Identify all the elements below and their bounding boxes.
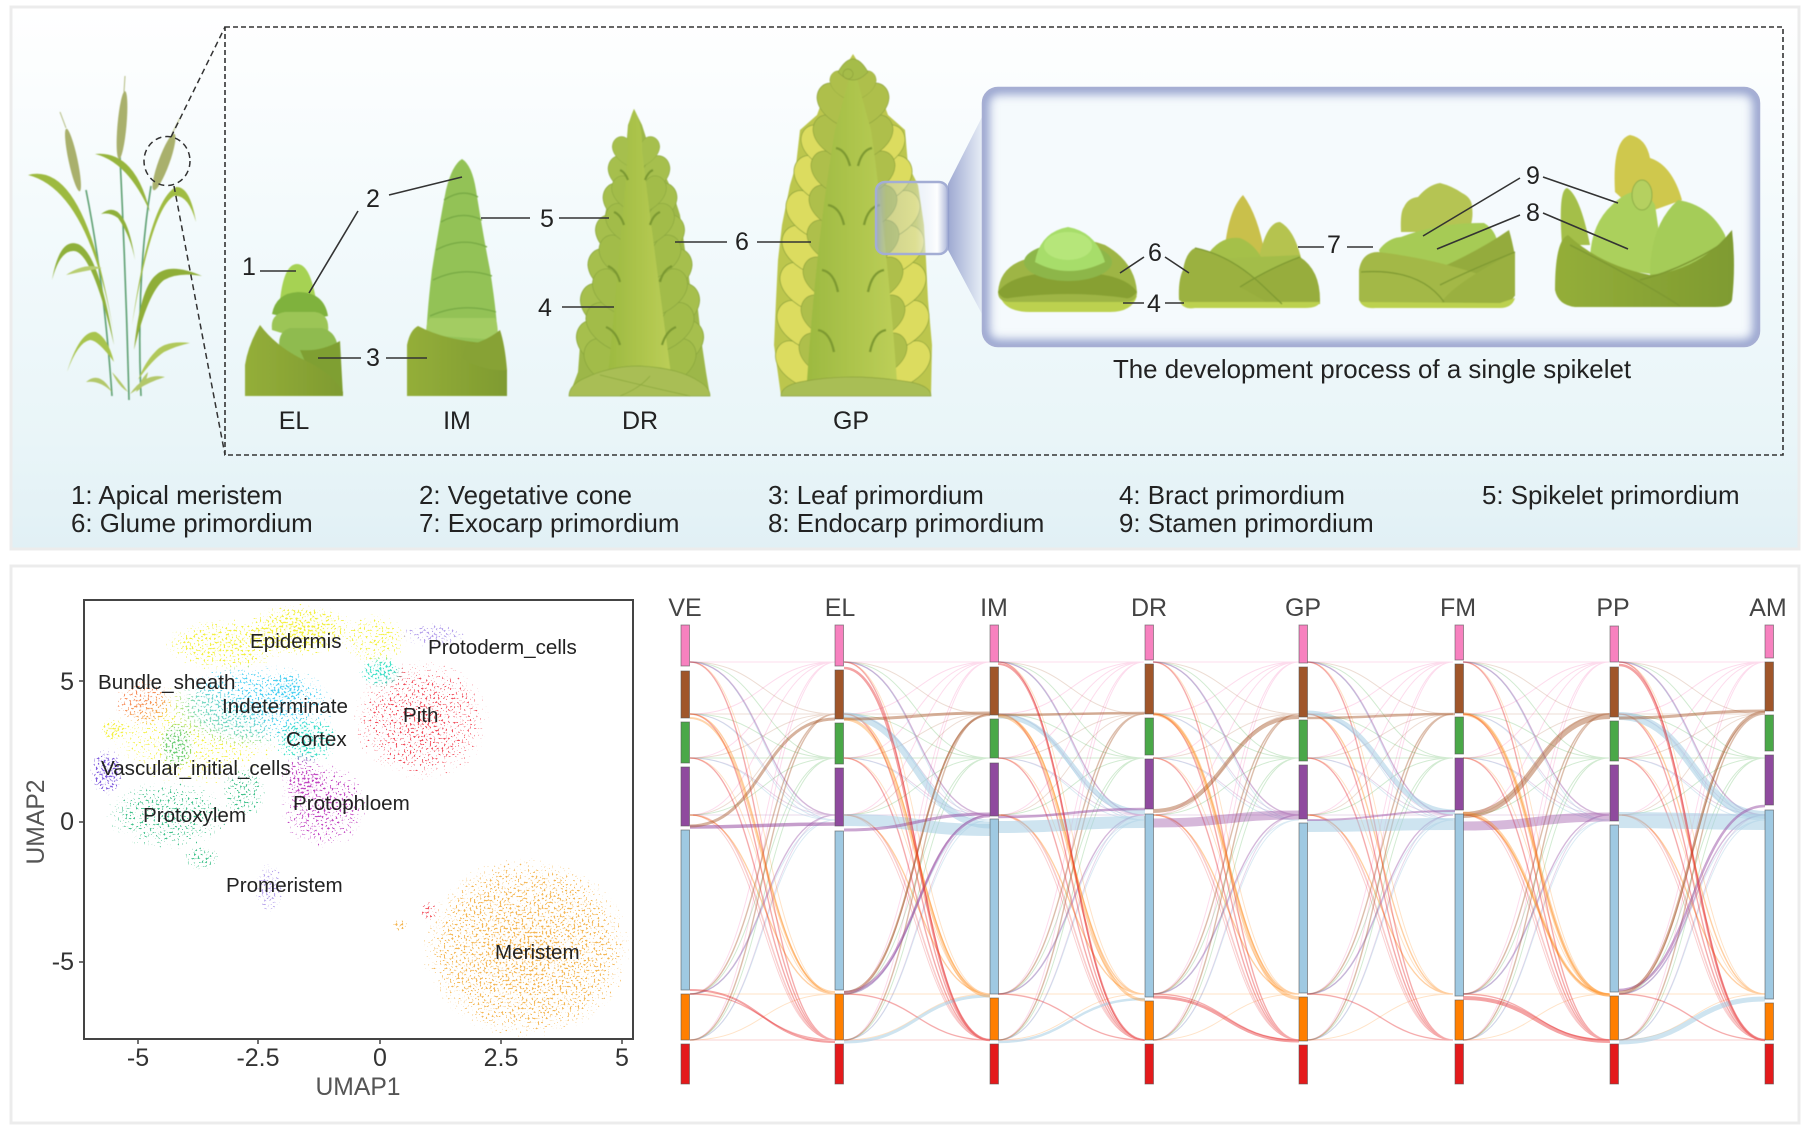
UMAP cluster labels: Epidermis bbox=[250, 630, 342, 653]
sankey: stage AM nodes bbox=[1765, 625, 1774, 1084]
spikelet caption: The development process of a single spikelet bbox=[1113, 356, 1631, 384]
callout numbers on spikelets bbox=[1120, 162, 1628, 318]
UMAP axes: -5 bbox=[52, 948, 74, 976]
sankey: stage headings: VE bbox=[668, 594, 702, 622]
stage labels: IM bbox=[443, 407, 471, 435]
wheat plant illustration bbox=[28, 76, 202, 400]
UMAP cluster labels: Cortex bbox=[286, 728, 347, 751]
zoom guides from wheat ear bbox=[144, 27, 225, 455]
stage labels: EL bbox=[279, 407, 309, 435]
stage labels: DR bbox=[622, 407, 658, 435]
sankey: stage IM nodes bbox=[990, 625, 998, 1084]
sankey: stage DR nodes bbox=[1145, 625, 1154, 1084]
spikelet stage 1 bbox=[998, 227, 1137, 312]
legend of primordia: 7: Exocarp primordium bbox=[419, 510, 679, 538]
panel: single-cell analysis bbox=[11, 566, 1799, 1123]
UMAP axes: UMAP2 bbox=[23, 779, 50, 865]
dashed inset frame bbox=[225, 27, 1783, 455]
callout numbers on spikelets: 9 bbox=[1526, 162, 1540, 190]
sankey: stage FM nodes bbox=[1455, 625, 1464, 1084]
legend of primordia: 9: Stamen primordium bbox=[1119, 510, 1374, 538]
callout numbers on spikes bbox=[242, 177, 811, 372]
UMAP axes: 0 bbox=[60, 808, 74, 836]
stage labels: GP bbox=[833, 407, 869, 435]
sankey: stage GP nodes bbox=[1299, 625, 1308, 1084]
sankey: stage headings: AM bbox=[1749, 594, 1787, 622]
sankey: stage headings: FM bbox=[1440, 594, 1476, 622]
UMAP axes: 2.5 bbox=[484, 1044, 518, 1072]
UMAP axes: 5 bbox=[615, 1044, 629, 1072]
UMAP cluster labels: Protophloem bbox=[293, 792, 410, 815]
sankey: stage headings: IM bbox=[980, 594, 1008, 622]
legend of primordia: 2: Vegetative cone bbox=[419, 482, 632, 510]
UMAP frame bbox=[84, 600, 633, 1039]
legend of primordia: 8: Endocarp primordium bbox=[768, 510, 1044, 538]
UMAP cluster labels: Protoxylem bbox=[143, 804, 246, 827]
spike stage DR bbox=[569, 109, 710, 396]
legend of primordia: 1: Apical meristem bbox=[71, 482, 283, 510]
callout numbers on spikes: 5 bbox=[540, 205, 554, 233]
UMAP axes: UMAP1 bbox=[315, 1074, 401, 1101]
callout numbers on spikelets: 4 bbox=[1147, 290, 1161, 318]
spikelet development box bbox=[983, 88, 1759, 346]
UMAP cluster labels: Protoderm_cells bbox=[428, 636, 577, 659]
UMAP axes bbox=[23, 668, 629, 1101]
UMAP cluster labels: Meristem bbox=[495, 941, 580, 964]
sankey: stage headings: GP bbox=[1285, 594, 1321, 622]
magnified spikelet highlight box bbox=[876, 182, 948, 254]
spike stage GP bbox=[774, 54, 932, 396]
legend of primordia bbox=[71, 482, 1740, 538]
sankey: stage EL nodes bbox=[835, 625, 844, 1084]
sankey: stage headings bbox=[668, 594, 1787, 622]
callout numbers on spikelets: 7 bbox=[1327, 231, 1341, 259]
spike stage EL bbox=[245, 264, 343, 396]
callout numbers on spikelets: 6 bbox=[1148, 239, 1162, 267]
UMAP axes: 5 bbox=[60, 668, 74, 696]
callout numbers on spikes: 1 bbox=[242, 253, 256, 281]
UMAP cluster labels: Bundle_sheath bbox=[98, 671, 235, 694]
legend of primordia: 4: Bract primordium bbox=[1119, 482, 1345, 510]
sankey: stage VE nodes bbox=[681, 625, 690, 1084]
legend of primordia: 6: Glume primordium bbox=[71, 510, 313, 538]
UMAP axes: -2.5 bbox=[236, 1044, 280, 1072]
legend of primordia: 5: Spikelet primordium bbox=[1482, 482, 1740, 510]
zoom wedge to spikelet panel bbox=[948, 115, 983, 316]
UMAP cluster labels: Pith bbox=[403, 704, 438, 727]
sankey: thin flows between stages bbox=[690, 662, 1765, 1040]
callout numbers on spikes: 2 bbox=[366, 185, 380, 213]
spike stage IM bbox=[407, 159, 507, 396]
spikelet stage 3 bbox=[1359, 183, 1515, 308]
legend of primordia: 3: Leaf primordium bbox=[768, 482, 984, 510]
sankey: stage headings: DR bbox=[1131, 594, 1167, 622]
callout numbers on spikes: 6 bbox=[735, 228, 749, 256]
callout numbers on spikes: 4 bbox=[538, 294, 552, 322]
callout numbers on spikelets: 8 bbox=[1526, 199, 1540, 227]
UMAP cluster labels: Promeristem bbox=[226, 874, 343, 897]
spikelet stage 4 bbox=[1555, 135, 1734, 307]
sankey: stage headings: EL bbox=[825, 594, 855, 622]
stage labels bbox=[279, 407, 869, 435]
UMAP scatter points bbox=[90, 604, 630, 1038]
UMAP axes: -5 bbox=[127, 1044, 149, 1072]
sankey: stage headings: PP bbox=[1596, 594, 1630, 622]
panel: spike development bbox=[11, 7, 1799, 549]
sankey: major flows bbox=[690, 664, 1765, 1042]
UMAP cluster labels: Vascular_initial_cells bbox=[101, 757, 291, 780]
spikelet stage 2 bbox=[1179, 195, 1320, 308]
UMAP cluster labels: Indeterminate bbox=[222, 695, 348, 718]
UMAP cluster labels bbox=[98, 630, 580, 964]
UMAP axes: 0 bbox=[373, 1044, 387, 1072]
sankey: stage PP nodes bbox=[1610, 626, 1618, 1084]
callout numbers on spikes: 3 bbox=[366, 344, 380, 372]
